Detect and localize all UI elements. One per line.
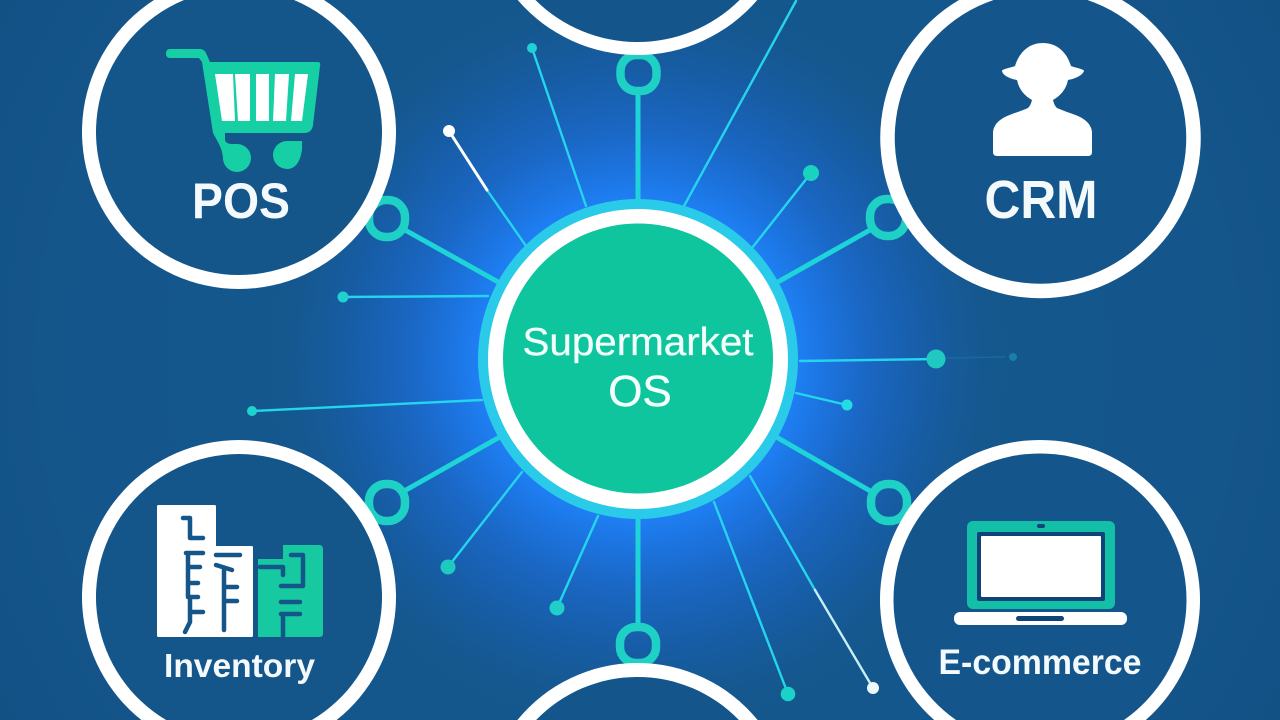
node: top (cropped): [518, 0, 757, 55]
connector lines radiating from hub: [252, 1, 1005, 694]
icon: inventory shelves: [157, 505, 323, 637]
node: POS: [82, 0, 396, 289]
hub: Supermarket OS: [478, 199, 798, 519]
connector rings: [369, 55, 907, 663]
icon: laptop: [954, 521, 1127, 625]
icon: person with hat: [993, 43, 1092, 156]
node: bottom (cropped): [517, 663, 758, 720]
hub label: Supermarket: [522, 321, 754, 364]
node: E-commerce: [880, 440, 1200, 720]
label: POS: POS: [192, 173, 290, 229]
label: E-commerce: E-commerce: [938, 643, 1142, 682]
icon: shopping cart: [166, 49, 320, 172]
label: Inventory: Inventory: [164, 647, 316, 684]
node: CRM: [880, 0, 1201, 298]
label: CRM: CRM: [984, 170, 1098, 230]
hub: Supermarket OS: OS: [608, 367, 672, 416]
connector end dots: [247, 43, 1017, 701]
node: Inventory: [82, 440, 396, 720]
